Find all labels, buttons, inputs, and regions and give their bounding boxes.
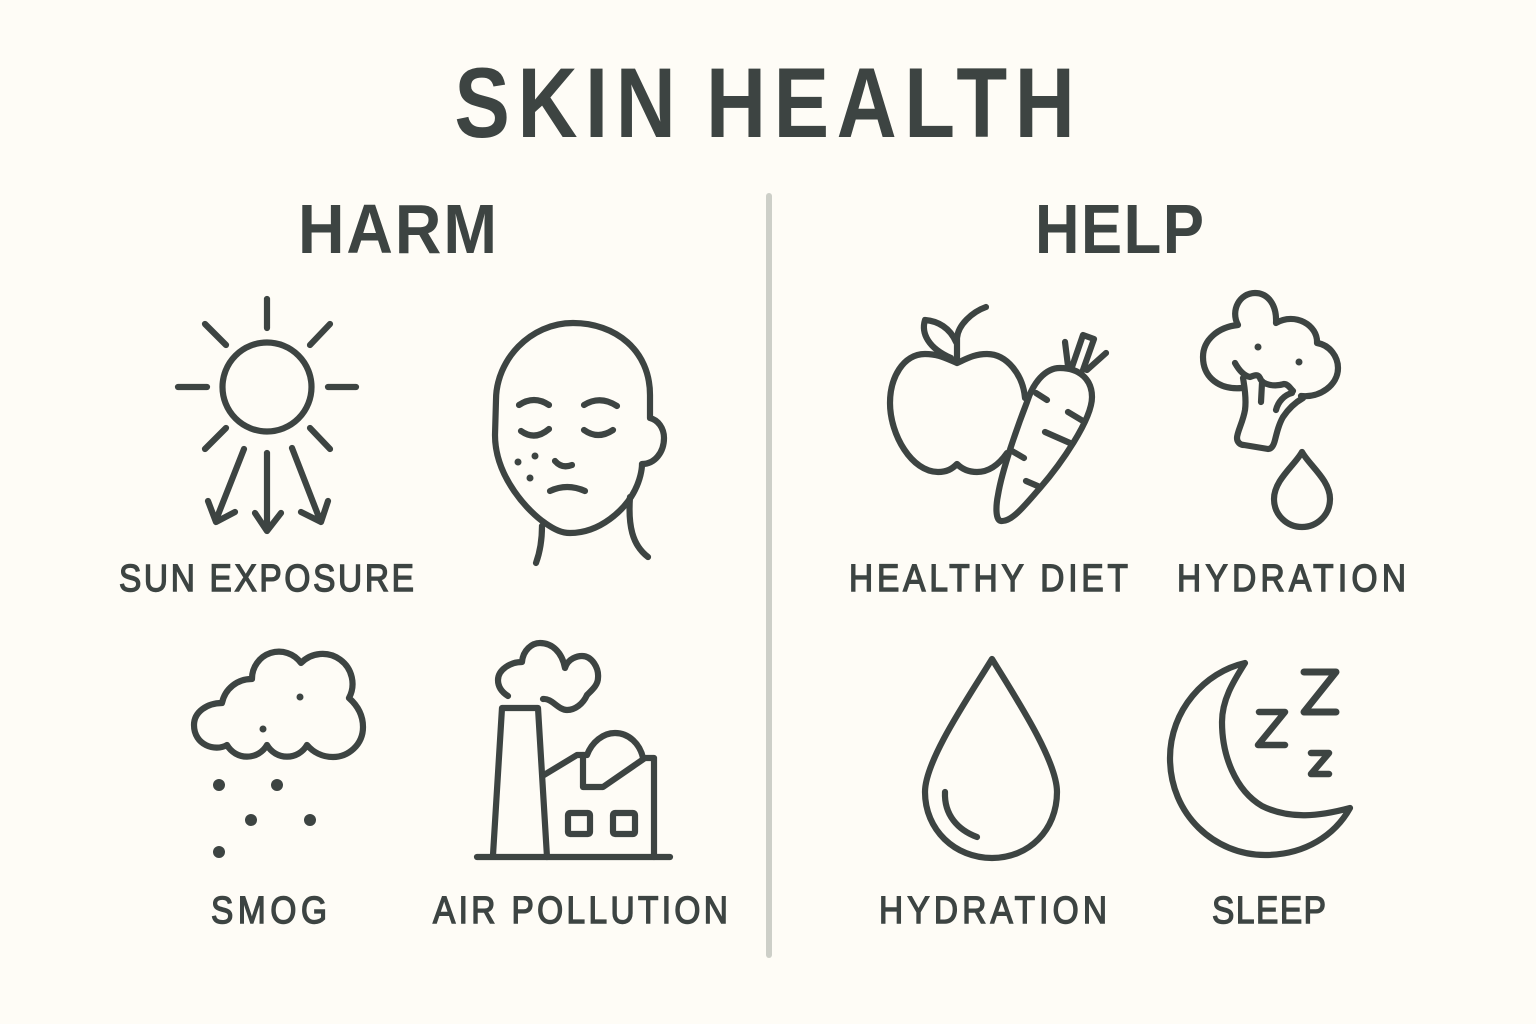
divider bbox=[766, 193, 772, 958]
panel: harm bbox=[119, 191, 728, 931]
panel: help bbox=[849, 189, 1406, 931]
label: sleep: SLEEP bbox=[1212, 889, 1326, 931]
label: sun exposure: SUN EXPOSURE bbox=[119, 557, 414, 599]
label: hydration bottom: HYDRATION bbox=[879, 889, 1107, 931]
heading: harm: HARM bbox=[298, 191, 497, 269]
icon: factory bbox=[477, 643, 670, 857]
label: healthy diet: HEALTHY DIET bbox=[849, 557, 1128, 599]
icon: face with blemishes bbox=[495, 323, 664, 563]
icon: water drop bbox=[925, 659, 1057, 858]
label: air pollution: AIR POLLUTION bbox=[433, 889, 728, 931]
label: smog: SMOG bbox=[211, 889, 327, 931]
heading: help: HELP bbox=[1035, 189, 1204, 268]
label: hydration top: HYDRATION bbox=[1177, 557, 1406, 599]
icon: moon and zzz bbox=[1170, 663, 1350, 855]
icon: sun exposure bbox=[178, 299, 356, 531]
icon: smog cloud bbox=[194, 652, 363, 858]
icon: broccoli and droplet bbox=[1203, 293, 1338, 527]
title: SKIN HEALTH bbox=[454, 48, 1082, 159]
icon: apple and carrot bbox=[890, 307, 1106, 521]
